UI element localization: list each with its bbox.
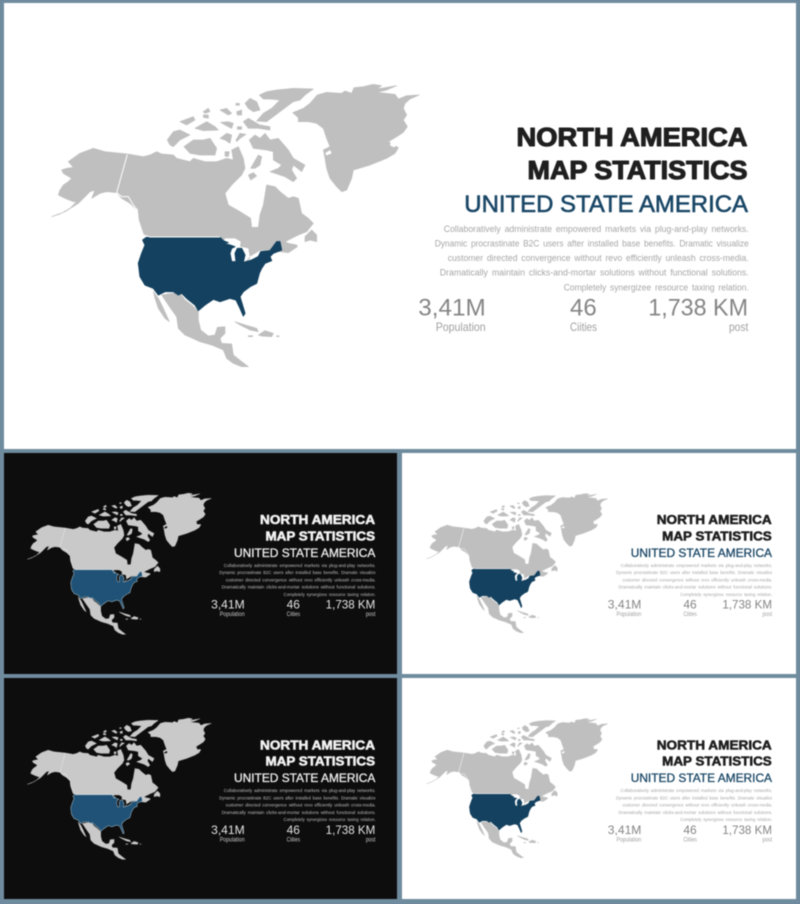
title and statistics text: customer directed convergence without revo efficiently unleash cross-media.: [448, 253, 749, 264]
title and statistics text: UNITED STATE AMERICA: [464, 191, 749, 218]
title and statistics text: [608, 512, 773, 618]
title and statistics text: UNITED STATE AMERICA: [631, 546, 773, 560]
title and statistics text: Population: [436, 320, 486, 334]
title and statistics text: post: [763, 612, 772, 618]
title and statistics text: NORTH AMERICA: [260, 512, 375, 527]
title and statistics text: Dynamic procrastinate B2C users after installed base benefits. Dramatic visualize: [435, 238, 749, 250]
title and statistics text: Collaboratively administrate empowered markets via plug-and-play networks.: [224, 788, 376, 794]
title and statistics text: 1,738 KM: [722, 598, 772, 612]
map: North America with United States highlighted: [52, 84, 419, 367]
panel: light slide top right: [402, 453, 796, 674]
title and statistics text: 46: [570, 295, 597, 322]
title and statistics text: 46: [287, 823, 300, 837]
title and statistics text: Completely synergizee resource taxing relation.: [284, 592, 376, 598]
title and statistics text: customer directed convergence without revo efficiently unleash cross-media.: [622, 803, 772, 809]
title and statistics text: NORTH AMERICA: [657, 512, 772, 527]
title and statistics text: Completely synergizee resource taxing relation.: [680, 817, 772, 823]
title and statistics text: 3,41M: [211, 598, 245, 612]
title and statistics text: UNITED STATE AMERICA: [234, 771, 376, 785]
title and statistics text: Completely synergizee resource taxing relation.: [564, 282, 749, 293]
slide background: [402, 453, 796, 674]
panel: light slide bottom right: [402, 678, 796, 899]
panel: dark slide bottom left: [4, 678, 397, 899]
map: North America with United States highlighted: [427, 493, 608, 633]
title and statistics text: Dramatically maintain clicks-and-mortar solutions without functional solutions.: [440, 268, 749, 279]
title and statistics text: Dynamic procrastinate B2C users after installed base benefits. Dramatic visualize: [219, 795, 376, 801]
title and statistics text: Collaboratively administrate empowered markets via plug-and-play networks.: [224, 563, 376, 569]
slide background: [402, 678, 796, 899]
slide background: [4, 678, 397, 899]
title and statistics text: [211, 737, 376, 843]
title and statistics text: 3,41M: [418, 295, 486, 322]
title and statistics text: Population: [220, 837, 245, 843]
title and statistics text: [418, 124, 749, 334]
title and statistics text: NORTH AMERICA: [260, 737, 375, 752]
title and statistics text: [608, 737, 773, 843]
title and statistics text: post: [763, 837, 772, 843]
map: North America with United States highlighted: [427, 718, 608, 858]
title and statistics text: 1,738 KM: [722, 823, 772, 837]
title and statistics text: Completely synergizee resource taxing relation.: [284, 817, 376, 823]
title and statistics text: Ciities: [287, 612, 300, 618]
title and statistics text: Ciities: [570, 320, 597, 334]
title and statistics text: Ciities: [683, 837, 697, 843]
title and statistics text: Dynamic procrastinate B2C users after installed base benefits. Dramatic visualize: [616, 570, 773, 576]
title and statistics text: Dramatically maintain clicks-and-mortar solutions without functional solutions.: [222, 810, 376, 816]
title and statistics text: NORTH AMERICA: [657, 737, 772, 752]
title and statistics text: MAP STATISTICS: [528, 157, 748, 185]
slide background: [4, 3, 796, 449]
title and statistics text: Dynamic procrastinate B2C users after installed base benefits. Dramatic visualize: [616, 795, 773, 801]
title and statistics text: MAP STATISTICS: [662, 754, 772, 769]
title and statistics text: UNITED STATE AMERICA: [631, 771, 773, 785]
title and statistics text: post: [729, 320, 749, 334]
title and statistics text: 1,738 KM: [648, 295, 748, 322]
title and statistics text: UNITED STATE AMERICA: [234, 546, 376, 560]
title and statistics text: customer directed convergence without revo efficiently unleash cross-media.: [226, 577, 376, 583]
title and statistics text: 46: [683, 823, 697, 837]
slide background: [4, 453, 397, 674]
title and statistics text: Dramatically maintain clicks-and-mortar solutions without functional solutions.: [618, 585, 772, 591]
title and statistics text: Ciities: [683, 612, 697, 618]
panel: dark slide top left: [4, 453, 397, 674]
title and statistics text: Dramatically maintain clicks-and-mortar solutions without functional solutions.: [618, 810, 772, 816]
title and statistics text: post: [366, 612, 376, 618]
title and statistics text: 1,738 KM: [326, 823, 375, 837]
title and statistics text: Population: [616, 837, 641, 843]
title and statistics text: Collaboratively administrate empowered markets via plug-and-play networks.: [620, 788, 772, 794]
title and statistics text: Population: [220, 612, 245, 618]
title and statistics text: Dynamic procrastinate B2C users after installed base benefits. Dramatic visualize: [219, 570, 376, 576]
title and statistics text: Ciities: [287, 837, 300, 843]
title and statistics text: Completely synergizee resource taxing relation.: [680, 592, 772, 598]
title and statistics text: 1,738 KM: [326, 598, 375, 612]
title and statistics text: 3,41M: [211, 823, 245, 837]
title and statistics text: Collaboratively administrate empowered markets via plug-and-play networks.: [444, 224, 749, 235]
title and statistics text: 46: [683, 598, 697, 612]
title and statistics text: Dramatically maintain clicks-and-mortar solutions without functional solutions.: [222, 585, 376, 591]
map: North America with United States highlighted: [27, 718, 211, 859]
title and statistics text: Population: [616, 612, 641, 618]
title and statistics text: 3,41M: [608, 823, 641, 837]
title and statistics text: MAP STATISTICS: [662, 528, 772, 543]
title and statistics text: 46: [287, 598, 300, 612]
title and statistics text: MAP STATISTICS: [265, 754, 375, 769]
title and statistics text: customer directed convergence without revo efficiently unleash cross-media.: [622, 577, 772, 583]
title and statistics text: customer directed convergence without revo efficiently unleash cross-media.: [226, 803, 376, 809]
title and statistics text: MAP STATISTICS: [265, 528, 375, 543]
map: North America with United States highlighted: [27, 493, 211, 634]
title and statistics text: NORTH AMERICA: [516, 124, 748, 152]
panel: large light slide: [4, 3, 796, 449]
title and statistics text: Collaboratively administrate empowered markets via plug-and-play networks.: [620, 563, 772, 569]
title and statistics text: 3,41M: [608, 598, 641, 612]
title and statistics text: post: [366, 837, 376, 843]
title and statistics text: [211, 512, 376, 618]
